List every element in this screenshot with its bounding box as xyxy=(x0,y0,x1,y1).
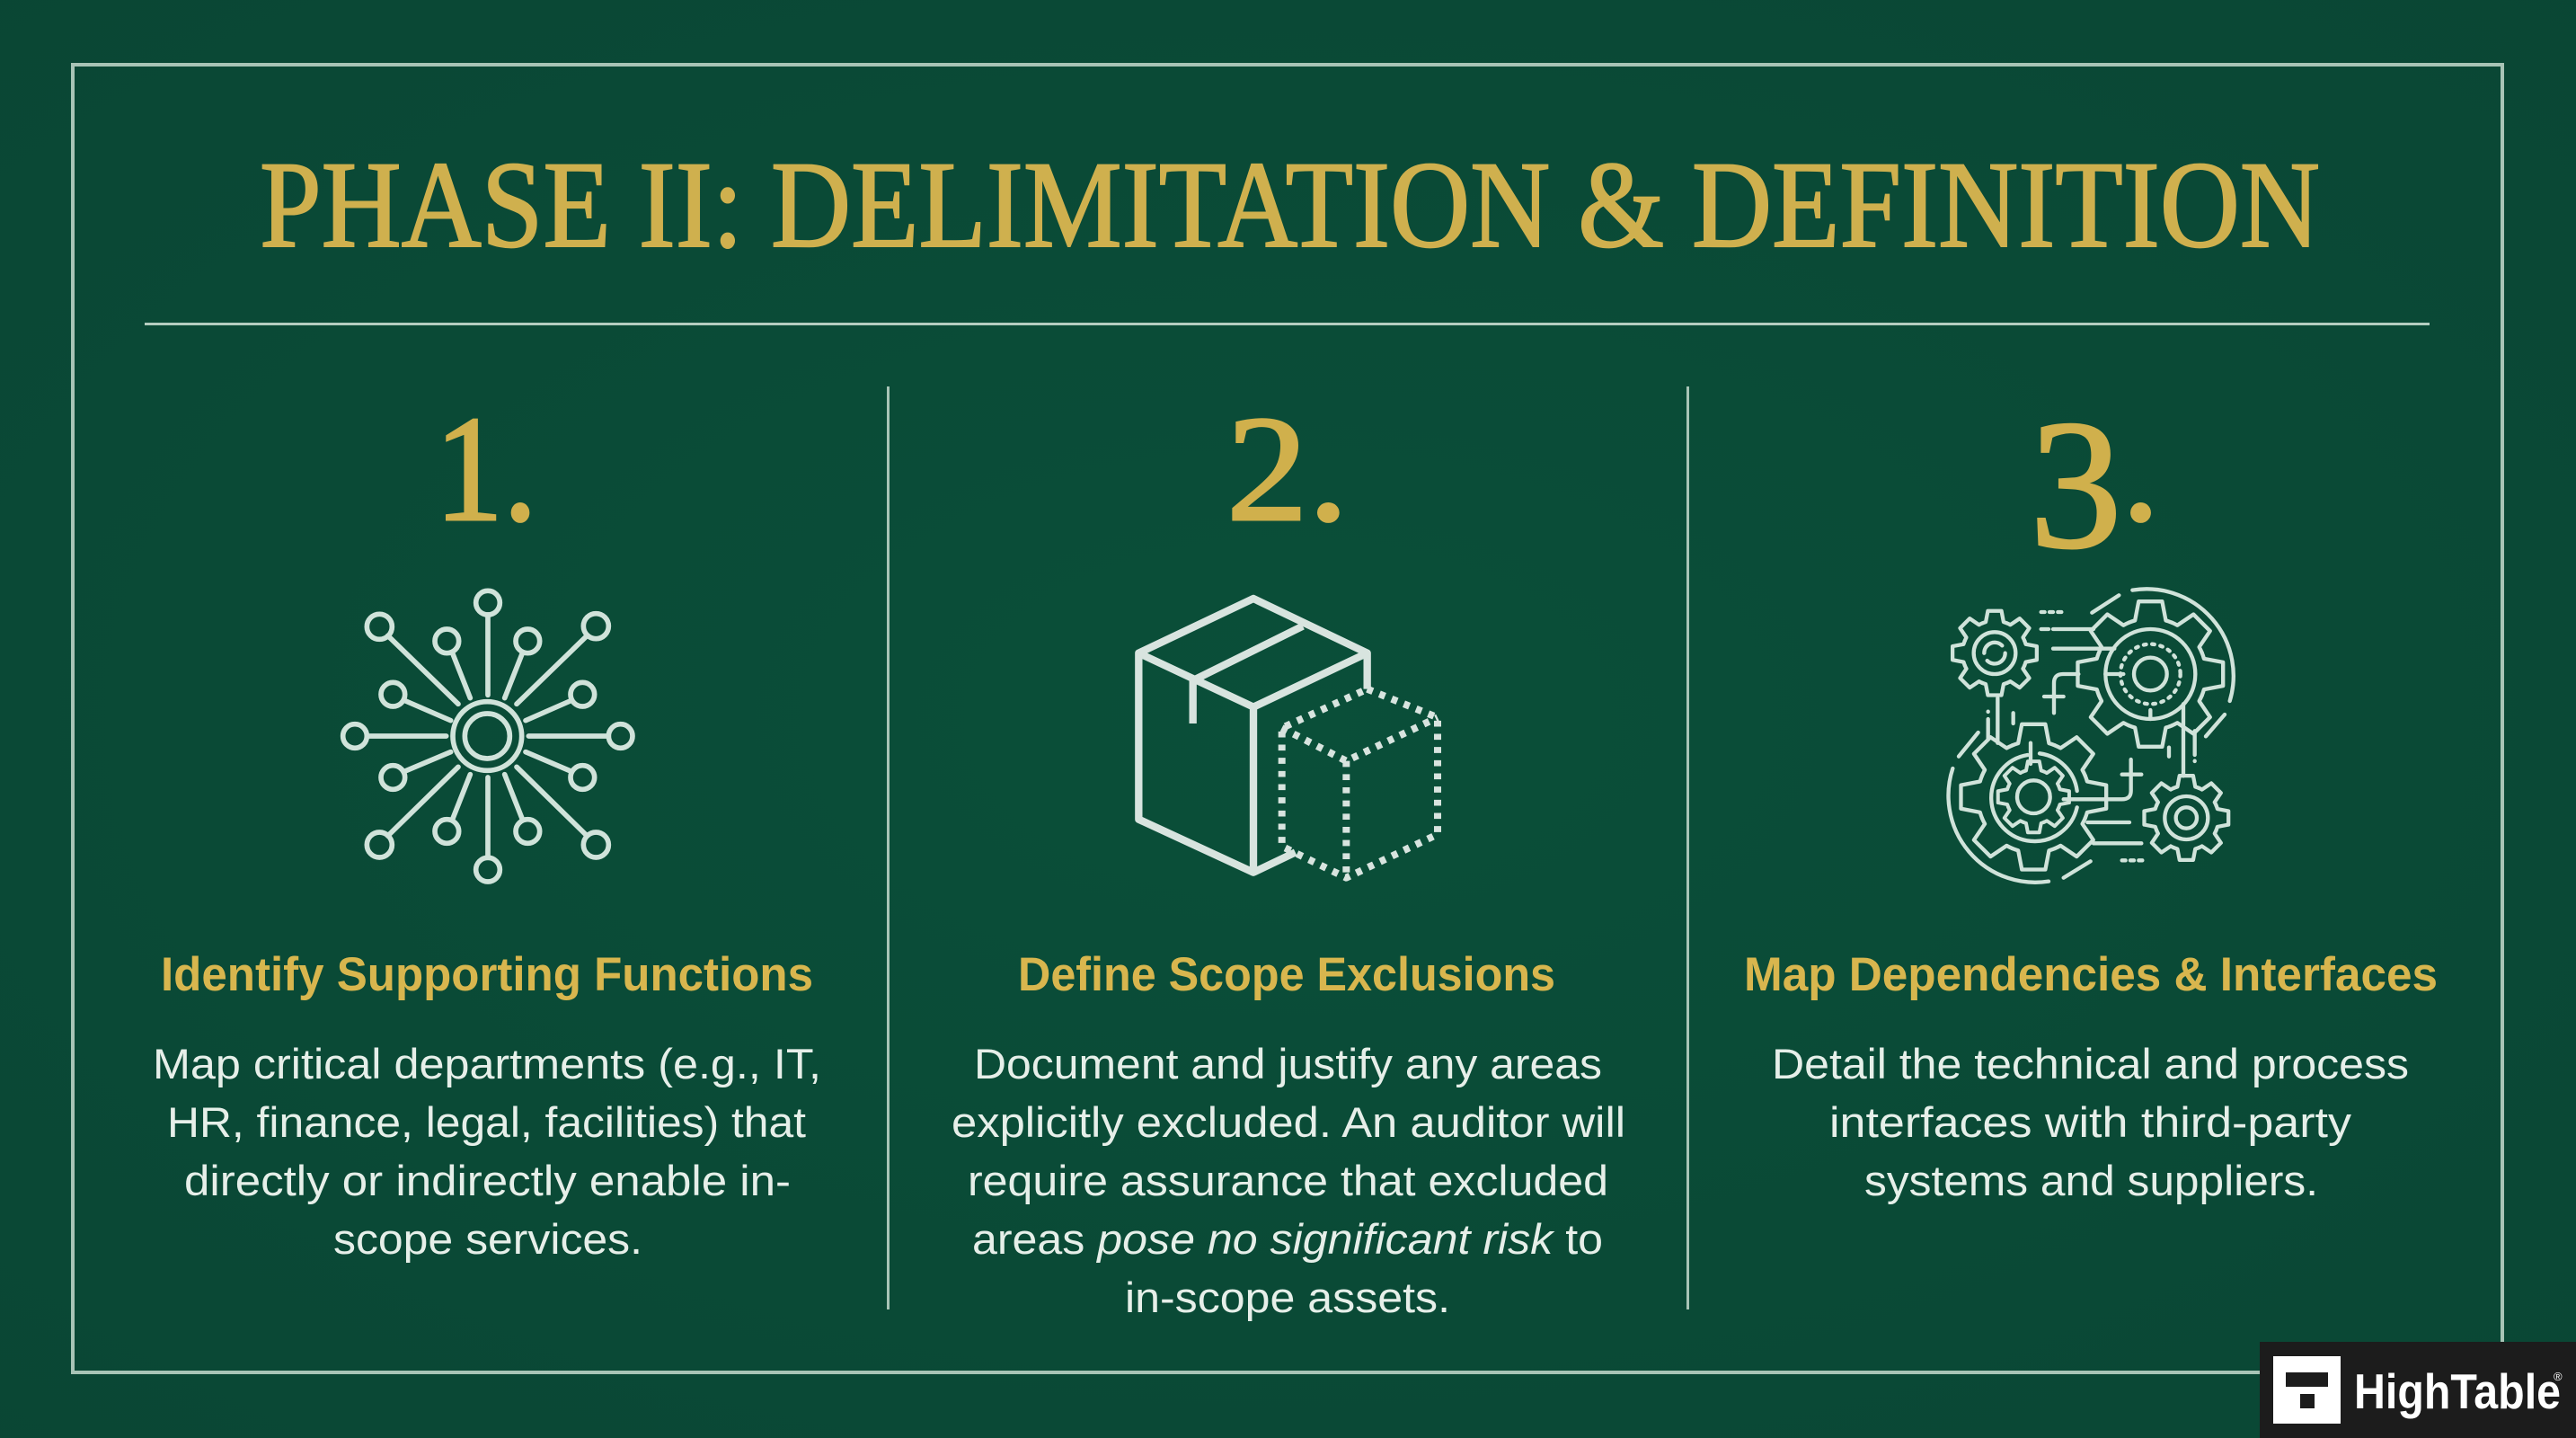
body text xyxy=(153,1040,821,1263)
body text: areas pose no significant risk to xyxy=(972,1215,1603,1263)
title: PHASE II: DELIMITATION & DEFINITION xyxy=(260,136,2320,273)
icon: hub and nodes network xyxy=(343,590,633,882)
panel: map dependencies and interfaces xyxy=(1744,383,2438,1204)
panel: identify supporting functions xyxy=(153,386,821,1263)
body text: Detail the technical and process xyxy=(1772,1040,2409,1087)
column divider 1 xyxy=(887,386,890,1309)
body text: Map critical departments (e.g., IT, xyxy=(153,1040,821,1087)
body text: Document and justify any areas xyxy=(974,1040,1602,1087)
body text: explicitly excluded. An auditor will xyxy=(952,1098,1625,1146)
body text xyxy=(952,1040,1625,1321)
icon: solid box with dotted box xyxy=(1138,599,1438,878)
logo: HighTable badge xyxy=(2260,1342,2576,1438)
number 2: 2. xyxy=(1226,386,1349,553)
registered mark: ® xyxy=(2554,1370,2563,1383)
icon: interlocking gears xyxy=(1949,589,2234,883)
number 3: 3 xyxy=(2030,383,2122,587)
body text: scope services. xyxy=(333,1215,642,1263)
panel: define scope exclusions xyxy=(952,386,1625,1321)
body text: interfaces with third-party xyxy=(1829,1098,2352,1146)
heading: Identify Supporting Functions xyxy=(161,948,813,1001)
heading: Map Dependencies & Interfaces xyxy=(1744,948,2438,1001)
column divider 2 xyxy=(1686,386,1689,1309)
body text: require assurance that excluded xyxy=(968,1157,1608,1204)
icon: logo mark xyxy=(2273,1356,2341,1424)
body text: HR, finance, legal, facilities) that xyxy=(167,1098,806,1146)
body text: systems and suppliers. xyxy=(1864,1157,2318,1204)
number 3: . xyxy=(2122,386,2160,553)
heading: Define Scope Exclusions xyxy=(1018,948,1555,1001)
body text: directly or indirectly enable in- xyxy=(184,1157,791,1204)
body text xyxy=(1772,1040,2409,1204)
number 1: 1. xyxy=(435,386,537,553)
title rule xyxy=(145,323,2430,325)
body text: in-scope assets. xyxy=(1125,1274,1450,1321)
